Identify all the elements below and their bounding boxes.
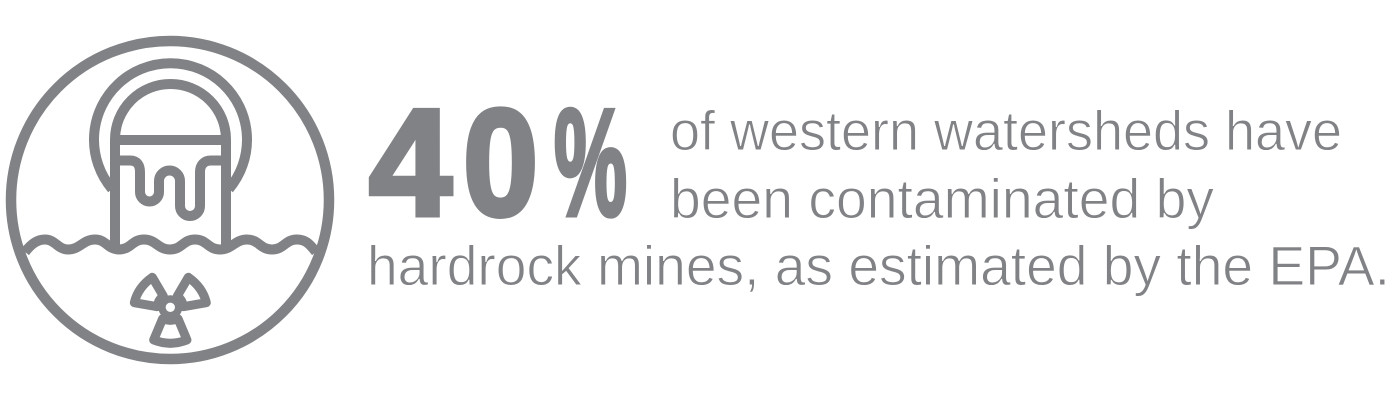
- right blade: [177, 277, 206, 307]
- left blade: [134, 277, 163, 307]
- text line 3: hardrock mines, as estimated by the EPA.: [367, 234, 1390, 297]
- percent sign: %: [554, 77, 627, 247]
- headline figure: 40%: [369, 77, 627, 248]
- text line 2: been contaminated by: [670, 167, 1214, 230]
- statement text: [367, 99, 1390, 297]
- bucket body and handle: [115, 84, 226, 246]
- bottom blade: [154, 319, 187, 343]
- bucket rim line: [115, 135, 226, 145]
- paint drips: [115, 160, 226, 216]
- digit 4: 4: [369, 78, 452, 247]
- center hub: [162, 299, 179, 316]
- pipe arch behind bucket: [94, 63, 247, 189]
- icon: polluted water bucket badge: [11, 41, 329, 359]
- radiation symbol: [134, 277, 206, 343]
- water waves: [25, 240, 316, 252]
- icon ring: [11, 41, 329, 359]
- digit 0: 0: [463, 79, 538, 248]
- text line 1: of western watersheds have: [670, 99, 1342, 162]
